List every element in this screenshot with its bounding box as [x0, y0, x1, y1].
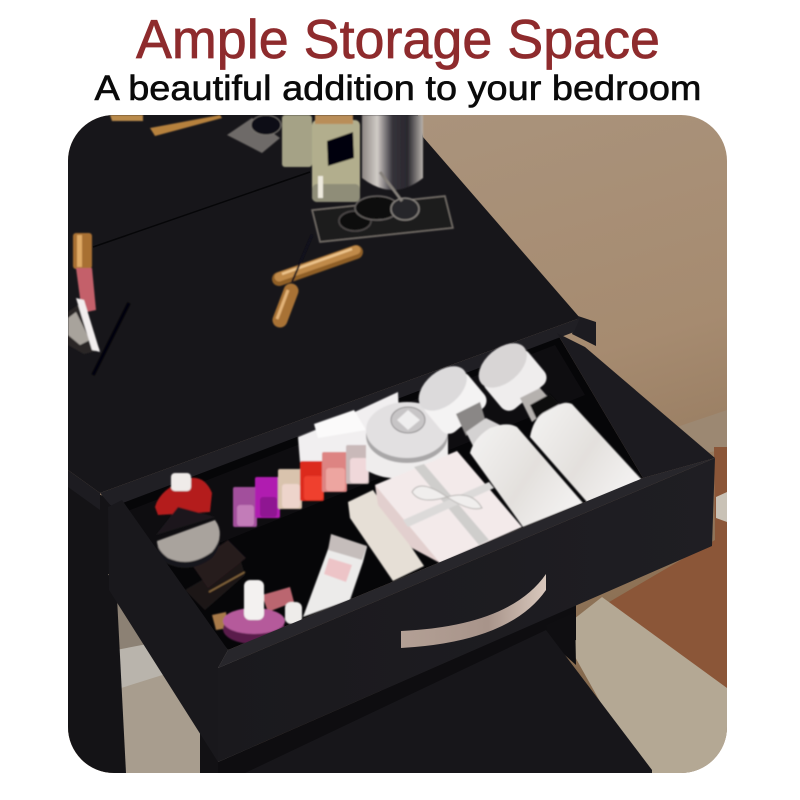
drawer interior [110, 333, 643, 650]
crystal-top jar [366, 402, 448, 478]
white bottle, right [470, 334, 642, 502]
mirrored tray, top [227, 118, 280, 153]
cream lipstick [278, 469, 302, 509]
drawer front panel [218, 458, 715, 762]
small glass bottle [282, 115, 312, 167]
perfume bottle with black label [312, 115, 360, 202]
light pink lipstick [346, 445, 369, 484]
cream tube [303, 534, 367, 617]
subtitle: A beautiful addition to your bedroom [94, 69, 702, 108]
nail polish [223, 580, 285, 644]
round compact mirror [156, 507, 220, 568]
infographic canvas [68, 18, 727, 773]
gold lipstick cap [277, 290, 291, 320]
white ribbon gift item [68, 298, 100, 354]
items on the desktop [68, 115, 453, 375]
drawer left side panel [108, 500, 228, 762]
bedroom background [68, 115, 727, 773]
magenta lipstick [255, 477, 280, 518]
white box [298, 392, 400, 470]
mirrored tray with compacts [312, 172, 453, 242]
drawer right side wall [557, 333, 715, 478]
cream box under gift [348, 490, 424, 581]
desktop front lip [100, 318, 580, 507]
items in the drawer [155, 334, 642, 644]
silver jar [362, 115, 423, 190]
dark cosmetic cases [185, 540, 246, 610]
compact on top tray [251, 115, 281, 135]
pink lipstick [322, 452, 347, 492]
purple lipstick [233, 487, 257, 527]
thin black brush [292, 235, 312, 282]
small white cap [285, 602, 302, 624]
gold tubes, top edge [110, 115, 222, 136]
vanity desktop [68, 115, 596, 510]
product photo panel [68, 115, 727, 773]
white bottle, centre [410, 357, 583, 527]
pink nail polish bottle [262, 587, 294, 612]
gold cosmetic piece [212, 612, 228, 630]
pink lip gloss [73, 233, 96, 313]
red perfume bottle [155, 473, 212, 515]
title: Ample Storage Space [136, 8, 660, 70]
vanity legs and lower shelf [68, 480, 652, 773]
red lipstick [300, 461, 324, 501]
gift box with ribbon [375, 451, 522, 563]
gold lipstick tube, lying [279, 249, 356, 279]
drawer slide rail [108, 574, 109, 576]
drawer handle [401, 574, 546, 648]
black pen [93, 303, 129, 375]
